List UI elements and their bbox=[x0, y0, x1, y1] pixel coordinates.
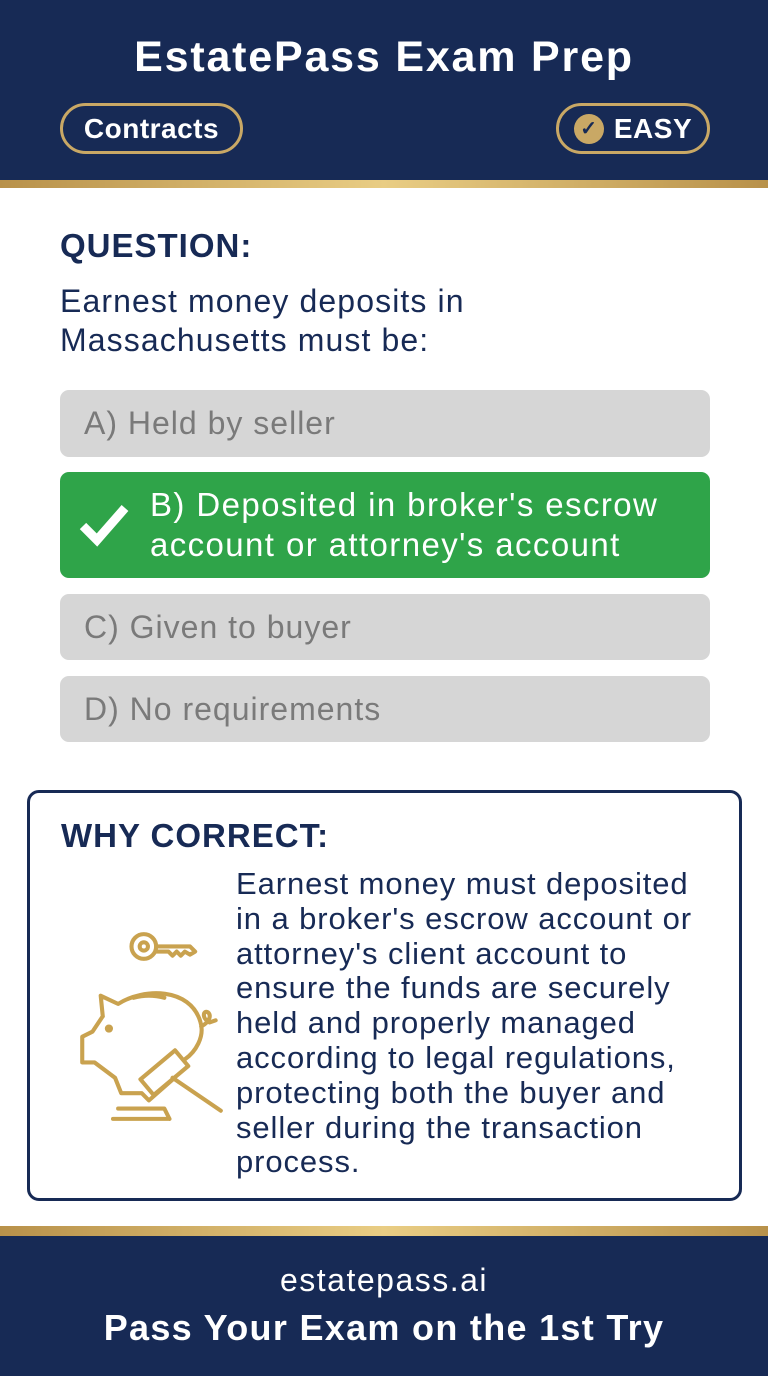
icon: piggy bank gavel bbox=[80, 932, 223, 1121]
explanation text: according to legal regulations, bbox=[236, 1040, 676, 1075]
title: EstatePass Exam Prep bbox=[134, 33, 634, 81]
option A bbox=[60, 390, 710, 457]
explanation text: in a broker's escrow account or bbox=[236, 901, 692, 936]
option D bbox=[60, 676, 710, 742]
option A: A) Held by seller bbox=[84, 405, 336, 441]
why heading: WHY CORRECT: bbox=[61, 817, 329, 854]
footer tagline: Pass Your Exam on the 1st Try bbox=[104, 1307, 664, 1348]
option D: D) No requirements bbox=[84, 690, 381, 726]
explanation text bbox=[236, 866, 692, 1179]
option B correct: account or attorney's account bbox=[150, 526, 621, 563]
panel: why correct bbox=[27, 790, 742, 1201]
option B correct bbox=[60, 472, 710, 578]
question text: Massachusetts must be: bbox=[60, 322, 429, 358]
explanation text: process. bbox=[236, 1144, 360, 1179]
explanation text: ensure the funds are securely bbox=[236, 970, 671, 1005]
pill: difficulty: EASY bbox=[614, 112, 692, 144]
icon: check bbox=[80, 505, 128, 547]
pill: difficulty bbox=[556, 103, 710, 154]
explanation text: Earnest money must deposited bbox=[236, 866, 689, 901]
explanation text: seller during the transaction bbox=[236, 1110, 643, 1145]
question heading: QUESTION: bbox=[60, 227, 252, 264]
pill: category bbox=[60, 103, 243, 154]
pill: category: Contracts bbox=[84, 112, 219, 144]
option C: C) Given to buyer bbox=[84, 608, 352, 644]
header bbox=[0, 0, 768, 180]
footer url: estatepass.ai bbox=[280, 1262, 488, 1298]
option B correct: B) Deposited in broker's escrow bbox=[150, 486, 658, 523]
question text: Earnest money deposits in bbox=[60, 283, 465, 319]
footer bbox=[0, 1236, 768, 1376]
option C bbox=[60, 594, 710, 660]
explanation text: attorney's client account to bbox=[236, 936, 627, 971]
pill: difficulty: ✓ bbox=[580, 118, 598, 140]
explanation text: protecting both the buyer and bbox=[236, 1075, 665, 1110]
explanation text: held and properly managed bbox=[236, 1005, 636, 1040]
question text bbox=[60, 283, 465, 358]
